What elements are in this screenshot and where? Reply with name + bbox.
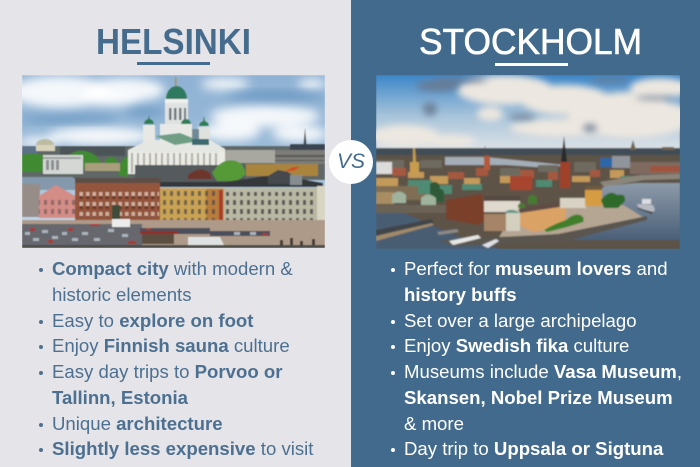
bullet list: Stockholm: Day trip to Uppsala or Sigtuna [404,438,663,459]
bullet list: Helsinki: historic elements [52,284,192,305]
VS badge [329,140,373,184]
water lower left [376,213,500,249]
bullet list: Stockholm: Museums include Vasa Museum, [404,361,682,382]
bullet list: Helsinki: Easy day trips to Porvoo or [52,361,282,382]
heading underline [137,62,210,64]
heading: Helsinki: HELSINKI [96,21,251,62]
panel: Helsinki [0,0,351,467]
bullet list: Stockholm: Skansen, Nobel Prize Museum [404,387,673,408]
bullet list: Helsinki: Compact city with modern & [52,258,293,279]
bullet list: Helsinki: Unique architecture [52,412,223,434]
bullet list: Stockholm: & more [404,412,464,434]
bullet list: Stockholm: Enjoy Swedish fika culture [404,335,629,356]
VS badge: VS [337,150,365,173]
panel: Stockholm [351,0,700,467]
heading underline [494,63,568,66]
bullet list: Helsinki: Enjoy Finnish sauna culture [52,335,290,356]
photo: Helsinki cathedral and waterfront [22,75,325,248]
bullet list: Stockholm [391,258,682,459]
bullet list: Stockholm: history buffs [404,284,517,305]
bullet list: Helsinki: Slightly less expensive to visit [52,438,313,459]
bullet list: Stockholm: Perfect for museum lovers and [404,258,668,279]
photo: Stockholm old town aerial view [376,75,680,249]
bullet list: Helsinki [39,258,314,459]
bullet list: Helsinki: Tallinn, Estonia [52,387,188,408]
heading: Stockholm: STOCKHOLM [419,21,642,62]
land mass [376,148,680,249]
island quay [498,197,643,239]
bullet list: Stockholm: Set over a large archipelago [404,310,637,330]
water right and lower [566,183,680,240]
dense roof mosaic [376,160,596,176]
bullet list: Helsinki: Easy to explore on foot [52,310,253,330]
